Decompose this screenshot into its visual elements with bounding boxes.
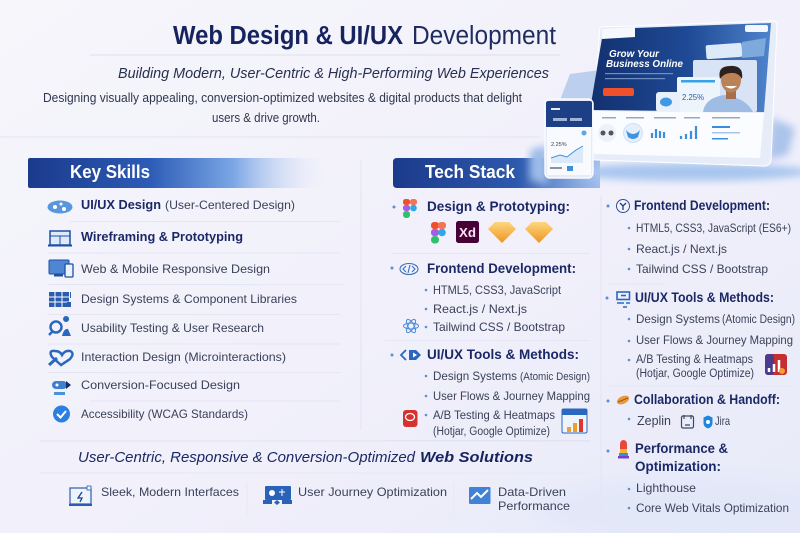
group: ui/ux tools: A/B Testing & Heatmaps — [636, 354, 753, 366]
skill: design systems: Design Systems & Component Libraries — [81, 292, 297, 306]
icon: journey nodes — [263, 486, 292, 505]
group: ui/ux tools: Design Systems — [433, 369, 517, 383]
phone — [545, 99, 593, 178]
skill: UI/UX design: UI/UX Design — [81, 198, 161, 212]
icon: collaboration leaf — [616, 394, 630, 406]
group: ui/ux tools: UI/UX Tools & Methods: — [427, 346, 579, 362]
icon: adobe xd — [456, 221, 479, 243]
feature: sleek interfaces — [69, 485, 239, 506]
feature: sleek interfaces: Sleek, Modern Interfaces — [101, 485, 239, 499]
feature: data driven: Data-Driven — [498, 485, 566, 499]
feature: user journey — [263, 485, 447, 505]
dashboard strip — [590, 111, 764, 158]
group: ui/ux tools: Design Systems — [636, 312, 720, 326]
subtitle: Building Modern, User-Centric & High-Performing Web Experiences — [118, 66, 549, 82]
icon: code brackets — [400, 264, 418, 274]
icon: heatmap chart — [562, 409, 587, 433]
group: frontend development: Frontend Development: — [634, 198, 770, 213]
group: ui/ux tools: (Atomic Design) — [520, 371, 590, 383]
heading: tech stack — [393, 158, 600, 188]
skill: UI/UX design: (User-Centered Design) — [165, 198, 295, 212]
laptop frame — [590, 21, 777, 166]
skill: conversion design: Conversion-Focused Design — [81, 378, 240, 392]
icon: hotjar — [403, 410, 418, 427]
icon: trend chart — [469, 487, 490, 504]
icon: jira shield — [704, 416, 712, 428]
icon: react — [404, 318, 418, 334]
person — [703, 95, 753, 112]
group: frontend development: React.js / Next.js — [433, 302, 527, 316]
hero illustration: website mockup on laptop and phone: 2.25% — [551, 142, 567, 148]
title: Development — [412, 22, 556, 50]
icon: figma — [403, 199, 417, 218]
panel: tech stack column one — [385, 158, 600, 440]
group: performance: Lighthouse — [636, 481, 696, 495]
icon: tools arrow — [401, 350, 421, 360]
group: collaboration: Collaboration & Handoff: — [634, 392, 780, 407]
panel: key skills — [28, 158, 345, 422]
group: performance: Core Web Vitals Optimization — [636, 501, 789, 515]
feature: data driven — [469, 485, 570, 513]
title: Web Design & UI/UX — [173, 22, 403, 50]
group: frontend development: React.js / Next.js — [636, 242, 727, 256]
website hero screen — [590, 23, 771, 112]
group: ui/ux tools: UI/UX Tools & Methods: — [635, 290, 774, 305]
group: ui/ux tools: User Flows & Journey Mapping — [636, 333, 793, 347]
skill: accessibility — [53, 406, 248, 422]
hero headline: Grow Your — [609, 49, 660, 60]
group: ui/ux tools: (Hotjar, Google Optimize) — [636, 368, 754, 380]
group: design and prototyping: Design & Prototyping: — [427, 198, 570, 214]
hero headline — [606, 49, 683, 70]
skill: interaction design: Interaction Design (Microinteractions) — [81, 350, 286, 364]
hero illustration: website mockup on laptop and phone: 2.25% — [682, 93, 704, 102]
heading: key skills — [28, 158, 330, 188]
group: performance: Optimization: — [635, 459, 721, 474]
description — [43, 91, 523, 125]
group: frontend development — [616, 198, 791, 276]
hero headline: Business Online — [606, 59, 683, 70]
skill: responsive design — [49, 260, 270, 277]
icon: heatmap app — [765, 354, 787, 375]
skill: UI/UX design — [48, 198, 295, 214]
footer headline: User-Centric, Responsive & Conversion-Optimized — [78, 449, 416, 466]
group: collaboration — [616, 392, 780, 428]
group: design and prototyping — [403, 198, 570, 244]
description: users & drive growth. — [212, 111, 320, 125]
heading: key skills: Key Skills — [70, 162, 150, 182]
feature: user journey: User Journey Optimization — [298, 485, 447, 499]
group: ui/ux tools: User Flows & Journey Mapping — [433, 389, 590, 403]
group: collaboration: Zeplin — [637, 414, 671, 428]
skill: accessibility: Accessibility (WCAG Standards) — [81, 407, 248, 421]
icon: frontend circle — [616, 200, 630, 212]
group: performance: Performance & — [635, 441, 728, 456]
group: frontend development — [400, 260, 576, 334]
group: ui/ux tools: A/B Testing & Heatmaps — [433, 408, 555, 422]
group: ui/ux tools — [401, 346, 590, 438]
hero illustration: website mockup on laptop and phone — [530, 21, 800, 185]
title — [173, 22, 556, 50]
skill: usability testing: Usability Testing & User Research — [81, 321, 264, 335]
icon: zeplin clipboard — [682, 415, 694, 428]
group: frontend development: Tailwind CSS / Bootstrap — [433, 320, 565, 334]
icon: interface window — [69, 486, 92, 506]
icon: adobe xd: Xd — [459, 225, 476, 240]
panel: web solutions footer — [69, 449, 570, 513]
icon: figma large — [431, 222, 446, 244]
skill: wireframing: Wireframing & Prototyping — [81, 230, 243, 244]
icon: performance beacon — [618, 440, 629, 458]
group: frontend development: Tailwind CSS / Bootstrap — [636, 262, 768, 276]
group: frontend development: Frontend Development: — [427, 260, 576, 276]
skill: wireframing — [48, 230, 243, 246]
feature: data driven: Performance — [498, 499, 570, 513]
icon: sketch — [488, 222, 516, 243]
footer headline: Web Solutions — [420, 449, 533, 466]
description: Designing visually appealing, conversion-optimized websites & digital products that delight — [43, 91, 523, 105]
icon: layout grid — [617, 292, 630, 307]
group: performance — [618, 440, 789, 515]
panel: tech stack column two — [606, 198, 795, 515]
icon: sketch second — [525, 222, 553, 243]
skill: responsive design: Web & Mobile Responsive Design — [81, 262, 270, 276]
heading: tech stack: Tech Stack — [425, 162, 516, 182]
group: collaboration: Jira — [715, 414, 730, 428]
skill: conversion design — [52, 378, 240, 395]
group: ui/ux tools — [617, 290, 795, 380]
group: frontend development: HTML5, CSS3, JavaScript — [433, 283, 562, 297]
cards — [706, 43, 742, 59]
skill: usability testing — [49, 316, 264, 336]
group: ui/ux tools: (Hotjar, Google Optimize) — [433, 426, 550, 438]
